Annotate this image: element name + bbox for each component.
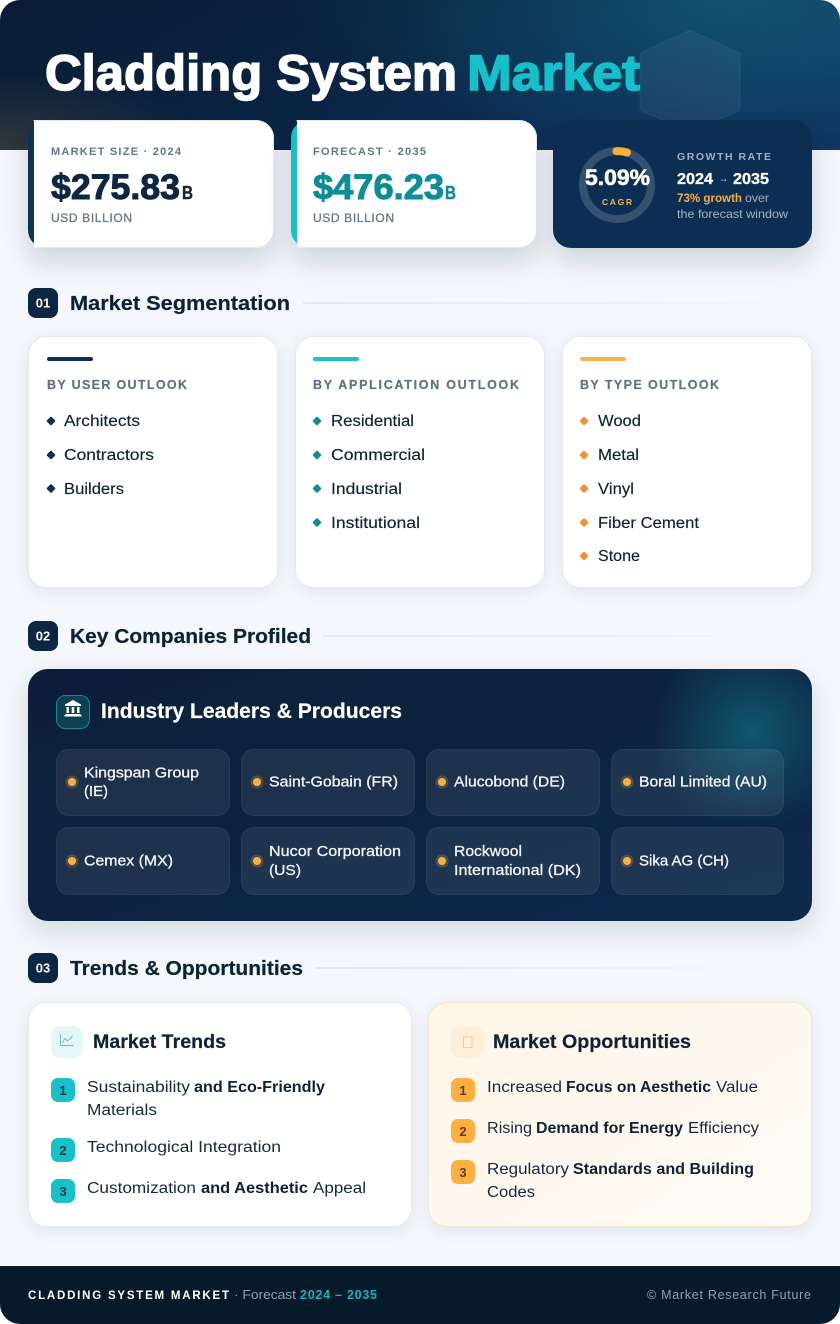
company dots	[66, 776, 634, 868]
icon: placeholder glyph	[451, 1026, 483, 1058]
panel: market opportunities: Demand for Energy	[536, 1120, 683, 1137]
panel: market opportunities: 1	[459, 1083, 467, 1098]
stat card: market size: $275.83	[51, 168, 180, 207]
stat card: market size: B	[182, 183, 193, 203]
panel: market opportunities: Rising	[487, 1120, 532, 1137]
section heading: key companies: 02	[36, 628, 50, 644]
icon: chart	[51, 1026, 83, 1058]
icon: institution building	[56, 696, 90, 728]
company names: Cemex (MX)	[84, 852, 173, 870]
panel: market trends: Technological Integration	[87, 1139, 281, 1156]
company tiles	[56, 750, 784, 894]
section heading: market segmentation	[28, 288, 556, 318]
panel: market opportunities: Standards and Building	[573, 1161, 754, 1178]
footer: © Market Research Future	[647, 1288, 811, 1302]
stat card: growth rate: over	[745, 191, 769, 205]
panel: by type outlook: Metal	[598, 447, 639, 464]
panel: market opportunities: Regulatory	[487, 1161, 569, 1178]
panel: by type outlook	[562, 336, 812, 588]
panel: industry leaders	[28, 669, 812, 921]
company names: Boral Limited (AU)	[639, 774, 767, 790]
panel: by user outlook: Builders	[64, 481, 124, 498]
footer: CLADDING SYSTEM MARKET	[28, 1290, 229, 1302]
panel: market trends: 3	[59, 1184, 67, 1199]
stat card: market size	[28, 120, 274, 248]
stat card: growth rate: GROWTH RATE	[677, 151, 771, 163]
section heading: trends and opportunities: 03	[36, 960, 50, 976]
panel: market trends: Market Trends	[93, 1032, 226, 1053]
stat card: forecast	[291, 120, 537, 248]
company names: Alucobond (DE)	[454, 774, 565, 790]
section heading: market segmentation: Market Segmentation	[70, 292, 290, 315]
header band	[0, 0, 840, 150]
section heading: market segmentation: 01	[36, 296, 50, 310]
panel: market trends: Sustainability	[87, 1079, 190, 1096]
donut chart: CAGR	[583, 151, 651, 219]
panel: by type outlook: Fiber Cement	[598, 515, 700, 532]
company names: Sika AG (CH)	[639, 852, 729, 870]
section heading: key companies	[28, 621, 566, 651]
panel: market opportunities: 2	[459, 1124, 467, 1139]
stat card: growth rate: 73% growth	[677, 191, 742, 205]
panel: industry leaders: Industry Leaders & Producers	[101, 700, 402, 723]
stat card: growth rate	[553, 120, 812, 248]
donut chart: CAGR: 5.09%	[585, 165, 650, 190]
panel: market trends	[28, 1002, 412, 1226]
footer: 2024 – 2035	[300, 1288, 377, 1302]
stat card: market size: USD BILLION	[51, 211, 132, 225]
panel: by application outlook: Industrial	[331, 481, 402, 498]
panel: market opportunities: Market Opportunities	[493, 1032, 691, 1053]
panel: by type outlook: BY TYPE OUTLOOK	[580, 378, 719, 392]
title	[46, 52, 640, 102]
panel: market trends: 2	[59, 1143, 67, 1158]
stat card: forecast: FORECAST · 2035	[313, 146, 426, 158]
panel: by application outlook: Residential	[331, 413, 414, 430]
footer: · Forecast	[234, 1288, 297, 1302]
panel: by application outlook	[296, 336, 544, 588]
footer	[0, 1266, 840, 1324]
stat card: forecast: $476.23	[313, 168, 444, 207]
panel: by user outlook: Architects	[64, 413, 140, 430]
section heading: trends and opportunities	[28, 953, 562, 983]
company names: Nucor Corporation	[269, 843, 401, 860]
title: Cladding System	[45, 45, 457, 101]
panel: by type outlook: Vinyl	[598, 481, 634, 498]
panel: by application outlook: BY APPLICATION OUTLOOK	[313, 378, 519, 392]
company names: (US)	[269, 862, 301, 879]
donut chart: CAGR: CAGR	[602, 197, 632, 207]
stat card: market size: MARKET SIZE · 2024	[51, 146, 182, 158]
section heading: key companies: Key Companies Profiled	[70, 625, 311, 648]
section heading: trends and opportunities: Trends & Opportunities	[70, 957, 303, 980]
company names: (IE)	[84, 783, 108, 800]
company names: Kingspan Group	[84, 764, 199, 782]
stat card: forecast: B	[445, 183, 456, 203]
panel: market opportunities: Increased	[487, 1079, 562, 1096]
panel: by type outlook: Stone	[598, 548, 640, 565]
panel: market opportunities: Codes	[487, 1184, 535, 1201]
panel: market trends: Appeal	[313, 1180, 366, 1197]
company names: Rockwool	[454, 843, 522, 860]
panel: market trends: Materials	[87, 1102, 157, 1119]
panel: by user outlook: BY USER OUTLOOK	[47, 378, 187, 392]
panel: market trends: and Aesthetic	[201, 1180, 308, 1197]
panel: market opportunities: Efficiency	[688, 1120, 759, 1137]
panel: by type outlook: Wood	[598, 413, 641, 430]
panel: by application outlook: Commercial	[331, 447, 425, 464]
panel: market trends: and Eco-Friendly	[194, 1079, 325, 1096]
panel: market opportunities: 3	[459, 1165, 467, 1180]
panel: market opportunities	[428, 1002, 812, 1226]
company names: International (DK)	[454, 862, 581, 879]
panel: by user outlook: Contractors	[64, 447, 154, 464]
panel: market trends: 1	[59, 1083, 67, 1098]
panel: by application outlook: Institutional	[331, 515, 420, 532]
stat card: growth rate: 2024	[677, 171, 713, 188]
panel: market opportunities: Value	[716, 1079, 758, 1096]
stat card: forecast: USD BILLION	[313, 211, 394, 225]
title: Market	[467, 45, 640, 101]
panel: by user outlook	[28, 336, 278, 588]
company names: Saint-Gobain (FR)	[269, 774, 398, 790]
stat card: growth rate: the forecast window	[677, 207, 788, 221]
stat card: growth rate: 2035	[733, 171, 769, 188]
stat card: growth rate: →	[719, 171, 728, 185]
panel: market opportunities: Focus on Aesthetic	[566, 1079, 711, 1096]
panel: market trends: Customization	[87, 1180, 196, 1197]
company names	[84, 764, 767, 879]
